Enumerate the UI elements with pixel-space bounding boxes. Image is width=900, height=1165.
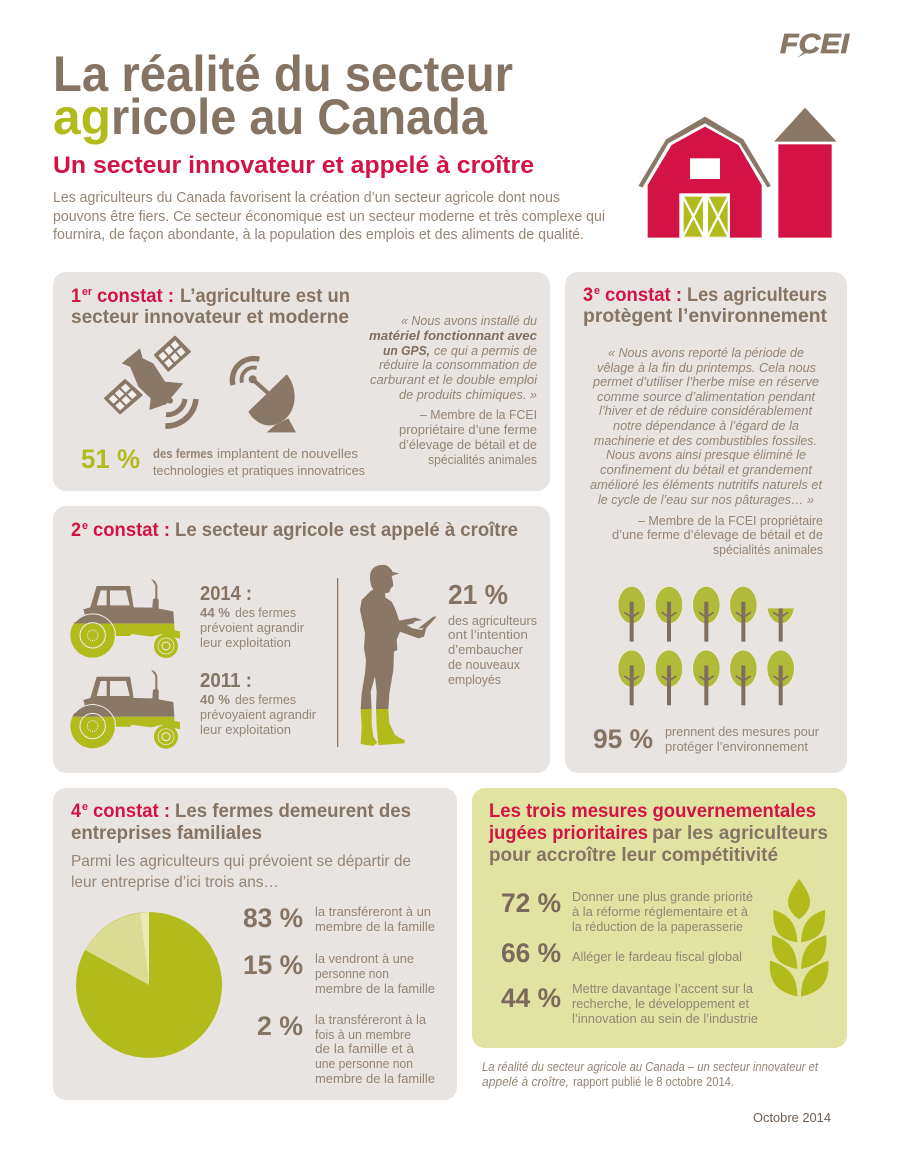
heading: constat 3: e: [594, 285, 600, 297]
stat: 2 %: une personne non: [315, 1056, 413, 1071]
icon: tractor 2014: [70, 579, 180, 658]
panel: constat 2: [53, 506, 550, 773]
stat: 51 %: technologies et pratiques innovatrices: [153, 463, 365, 478]
text: 21 %: ont l’intention: [448, 627, 528, 642]
heading: constat 4: [71, 801, 411, 844]
panel: constat 4: [53, 788, 457, 1100]
panel: constat 1: [53, 272, 550, 491]
stat: 15 %: personne non: [315, 966, 389, 981]
heading: constat 4: 4: [71, 801, 81, 822]
quote: GPS: un GPS,: [383, 343, 430, 358]
text: 2014: 2014 :: [200, 583, 252, 605]
stat: 72 %: Donner une plus grande priorité: [572, 889, 753, 904]
icon: barn and silo: [638, 108, 837, 238]
source note: [482, 1060, 818, 1089]
text: 21 %: employés: [448, 672, 501, 687]
stat: 44 %: 44 %: [501, 983, 561, 1013]
text: 2014: 44 %: [200, 605, 230, 620]
quote: GPS: « Nous avons installé du: [401, 313, 538, 328]
quote: environment: notre dépendance à l’égard de la: [613, 418, 799, 433]
heading: priorities: Les trois mesures gouvernementales: [489, 801, 816, 822]
source note: rapport publié le 8 octobre 2014.: [573, 1075, 734, 1089]
heading: constat 4: e: [82, 801, 88, 813]
title: ag: [53, 89, 111, 145]
text: 2011: [200, 670, 317, 737]
quote: GPS: [369, 313, 538, 467]
stat: 83 %: 83 %: [243, 903, 303, 933]
heading: constat 3: [583, 285, 828, 327]
heading: constat 2: e: [82, 520, 88, 532]
text: 2011: des fermes: [235, 692, 296, 707]
text: 2011: leur exploitation: [200, 722, 291, 737]
quote: environment: comme source d’alimentation pendant: [597, 389, 816, 404]
quote: environment: – Membre de la FCEI propriétaire: [638, 513, 823, 528]
intro text: leur entreprise d’ici trois ans…: [71, 874, 279, 891]
stat: 95 %: 95 %: [593, 724, 653, 754]
stat: 83 %: membre de la famille: [315, 919, 435, 934]
icon: ten trees, 95 percent: [618, 586, 794, 705]
stat: 15 %: la vendront à une: [315, 951, 414, 966]
heading: priorities: pour accroître leur compétitivité: [489, 845, 778, 866]
text: 2011: prévoyaient agrandir: [200, 707, 317, 722]
stat: 2 %: 2 %: [257, 1011, 303, 1041]
quote: environment: [590, 345, 823, 557]
heading: priorities: jugées prioritaires: [488, 823, 648, 844]
icon: wheat: [770, 879, 829, 997]
panel: government priorities: [472, 788, 847, 1048]
heading: priorities: par les agriculteurs: [652, 823, 828, 844]
text: 2011: 40 %: [200, 692, 230, 707]
stat: 83 %: la transféreront à un: [315, 904, 431, 919]
quote: GPS: matériel fonctionnant avec: [369, 328, 538, 343]
stat: 2 %: fois à un membre: [315, 1027, 411, 1042]
intro paragraph: pouvons être fiers. Ce secteur économique est un secteur moderne et très complexe qui: [53, 209, 605, 225]
stat: 51 %: [81, 444, 365, 478]
quote: environment: confinement du bétail et grandement: [600, 462, 813, 477]
text: 2014: leur exploitation: [200, 635, 291, 650]
text: 2014: prévoient agrandir: [200, 620, 305, 635]
icon: satellite: [105, 337, 196, 426]
quote: environment: « Nous avons reporté la période de: [608, 345, 804, 360]
quote: GPS: carburant et le double emploi: [370, 372, 538, 387]
heading: constat 1: L’agriculture est un: [180, 286, 350, 307]
icon: farmer with tablet: [360, 565, 437, 746]
stat: 2 %: de la famille et à: [315, 1041, 415, 1056]
quote: GPS: – Membre de la FCEI: [420, 407, 537, 422]
stat: 95 %: prennent des mesures pour: [665, 724, 820, 739]
heading: constat 3: Les agriculteurs: [687, 285, 827, 306]
heading: constat 4: Les fermes demeurent des: [175, 801, 411, 822]
stat: 15 %: 15 %: [243, 950, 303, 980]
title: ricole au Canada: [111, 89, 488, 145]
intro paragraph: Les agriculteurs du Canada favorisent la création d’un secteur agricole dont nous: [53, 190, 560, 206]
quote: environment: vêlage à la fin du printemps. Cela nous: [597, 360, 816, 375]
intro paragraph: [53, 190, 605, 243]
quote: environment: spécialités animales: [713, 542, 823, 557]
stat: 2 %: membre de la famille: [315, 1071, 435, 1086]
title: [53, 46, 513, 145]
stat: 72 %: [501, 888, 753, 934]
text: 21 %: [448, 579, 537, 687]
logo: FCEI: FCEI: [780, 28, 850, 59]
stat: 95 %: [593, 724, 820, 754]
stat: 15 %: [243, 950, 435, 996]
quote: GPS: ce qui a permis de: [434, 343, 537, 358]
source note: La réalité du secteur agricole au Canada – un secteur innovateur et: [482, 1060, 818, 1074]
quote: environment: le cycle de l’eau sur nos pâturages… »: [598, 492, 814, 507]
stat: 72 %: la réduction de la paperasserie: [572, 919, 743, 934]
stat: 15 %: membre de la famille: [315, 981, 435, 996]
heading: constat 2: 2: [71, 520, 81, 541]
icon: satellite dish: [232, 359, 296, 432]
text: 2011: 2011 :: [200, 670, 252, 692]
panel: constat 3: [565, 272, 847, 773]
source note: appelé à croître,: [482, 1075, 569, 1089]
stat: 51 %: 51 %: [81, 444, 140, 474]
stat: 44 %: Mettre davantage l’accent sur la: [572, 981, 754, 996]
stat: 44 %: [501, 981, 758, 1026]
heading: constat 3: protègent l’environnement: [583, 306, 828, 327]
text: 2014: [200, 583, 305, 650]
heading: constat 1: constat :: [97, 286, 174, 307]
text: 21 %: des agriculteurs: [448, 613, 537, 628]
heading: constat 1: [71, 286, 350, 328]
stat: 51 %: des fermes: [153, 446, 213, 461]
subtitle: Un secteur innovateur et appelé à croître: [53, 152, 534, 179]
heading: constat 3: constat :: [605, 285, 682, 306]
intro text: Parmi les agriculteurs qui prévoient se départir de: [71, 853, 411, 870]
quote: GPS: de produits chimiques. »: [399, 387, 537, 402]
heading: constat 4: constat :: [93, 801, 170, 822]
stat: 66 %: Alléger le fardeau fiscal global: [572, 949, 742, 964]
icon: tractor 2011: [70, 669, 180, 749]
stat: 66 %: [501, 938, 742, 968]
intro text: [71, 853, 411, 891]
quote: GPS: d’élevage de bétail et de: [399, 437, 537, 452]
title: La réalité du secteur: [53, 46, 513, 102]
stat: 2 %: [257, 1011, 435, 1086]
text: 2014: des fermes: [235, 605, 296, 620]
stat: 2 %: la transféreront à la: [315, 1012, 427, 1027]
quote: environment: amélioré les éléments nutritifs naturels et: [590, 477, 823, 492]
heading: constat 2: Le secteur agricole est appelé à croître: [175, 520, 518, 541]
quote: environment: permet d’utiliser l’herbe mise en réserve: [592, 374, 819, 389]
heading: constat 3: 3: [583, 285, 593, 306]
text: 21 %: 21 %: [448, 579, 508, 610]
heading: constat 1: 1: [71, 286, 81, 307]
quote: environment: l’hiver et de réduire considérablement: [599, 403, 813, 418]
stat: 95 %: protéger l’environnement: [665, 739, 808, 754]
stat: 51 %: implantent de nouvelles: [217, 446, 358, 461]
stat: 44 %: recherche, le développement et: [572, 996, 749, 1011]
heading: constat 2: constat :: [93, 520, 170, 541]
heading: constat 4: entreprises familiales: [71, 823, 262, 844]
quote: GPS: propriétaire d’une ferme: [399, 422, 537, 437]
intro paragraph: fournira, de façon abondante, à la population des emplois et des aliments de qualité.: [53, 227, 584, 243]
pie chart: [76, 912, 222, 1058]
stat: 66 %: 66 %: [501, 938, 561, 968]
text: 21 %: de nouveaux: [448, 657, 520, 672]
quote: environment: d’une ferme d’élevage de bétail et de: [612, 527, 823, 542]
text: 21 %: d’embaucher: [448, 642, 524, 657]
stat: 72 %: à la réforme réglementaire et à: [572, 904, 749, 919]
heading: constat 1: er: [82, 286, 93, 298]
heading: priorities: [488, 801, 828, 866]
date: Octobre 2014: [753, 1110, 831, 1125]
stat: 44 %: l’innovation au sein de l’industrie: [572, 1011, 758, 1026]
quote: environment: Nous avons ainsi presque éliminé le: [606, 447, 806, 462]
heading: constat 1: secteur innovateur et moderne: [71, 307, 349, 328]
quote: GPS: spécialités animales: [428, 452, 537, 467]
stat: 72 %: 72 %: [501, 888, 561, 918]
quote: environment: machinerie et des combustibles fossiles.: [594, 433, 817, 448]
stat: 83 %: [243, 903, 435, 934]
quote: GPS: réduire la consommation de: [379, 357, 537, 372]
